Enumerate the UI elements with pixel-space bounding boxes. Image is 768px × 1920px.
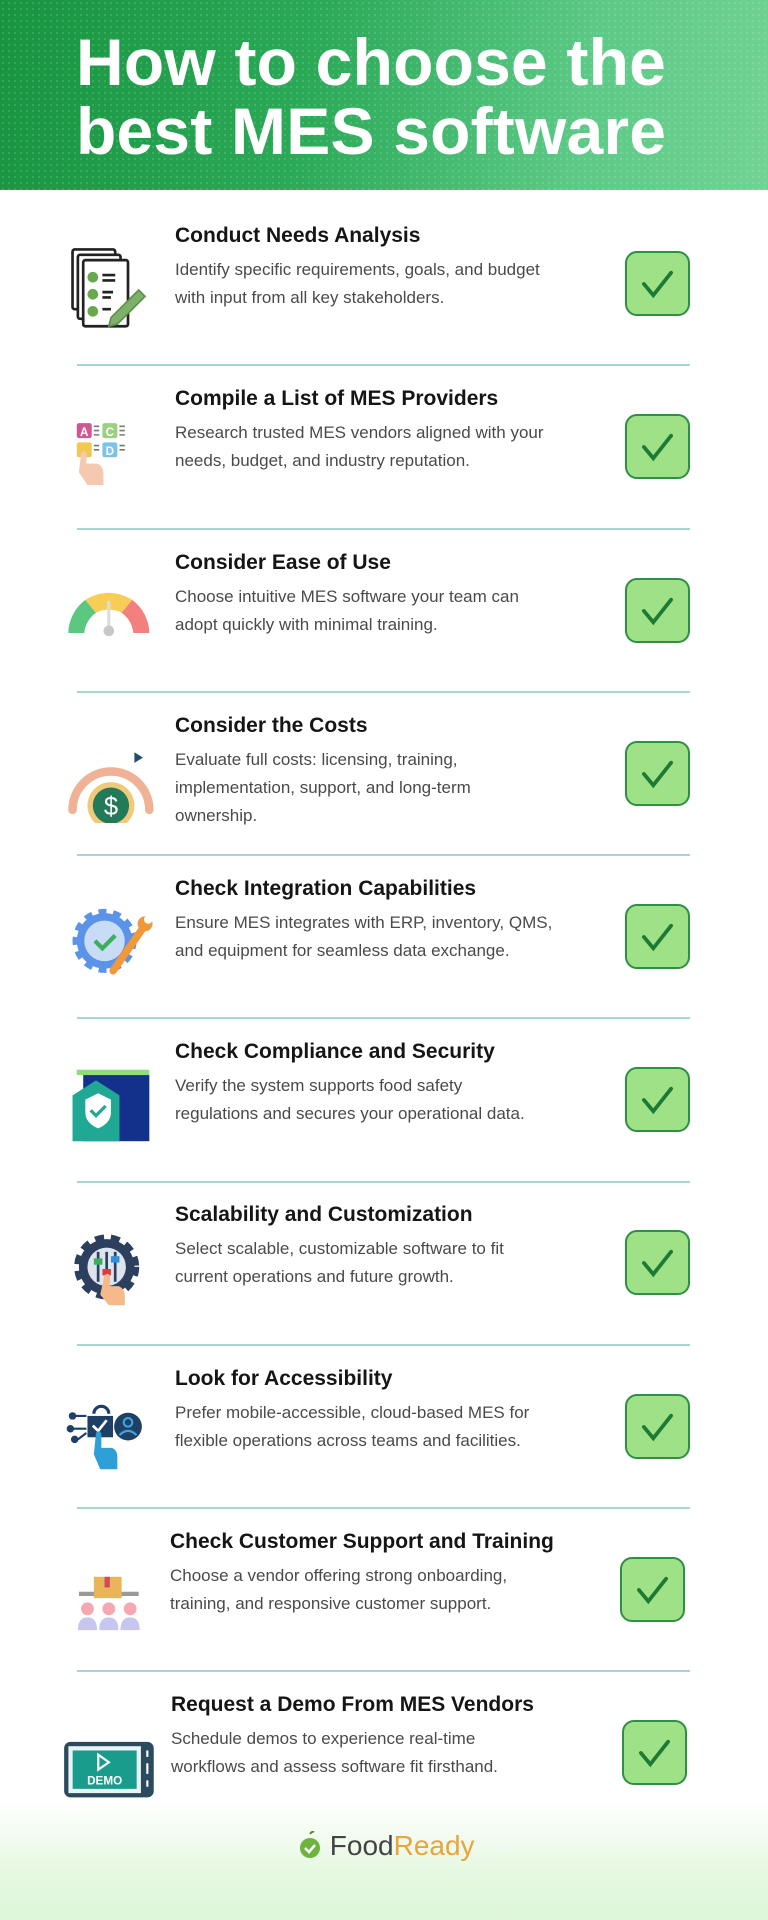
description [175,423,544,470]
description: and equipment for seamless data exchange. [175,941,510,960]
description: ownership. [175,806,257,825]
heading: Consider Ease of Use [175,551,391,574]
icon: checkbox [622,1720,687,1785]
icon: dollar coin: $ [104,793,118,821]
icon: gear sliders [74,1234,140,1306]
icon: checkbox [625,251,690,316]
description [175,913,552,960]
heading: Conduct Needs Analysis [175,224,420,247]
row 8: accessibility [66,1367,690,1470]
icon: gear and wrench [72,908,153,974]
icon: checkbox [625,414,690,479]
heading: Consider the Costs [175,714,368,737]
row 6: compliance [72,1040,690,1142]
description: current operations and future growth. [175,1267,454,1286]
header banner [0,0,768,190]
description: Schedule demos to experience real-time [171,1729,475,1748]
row 2: list of providers [76,387,690,485]
description: with input from all key stakeholders. [175,288,444,307]
icon: ABCD cards: C [106,426,115,439]
description: Verify the system supports food safety [175,1076,462,1095]
description: Evaluate full costs: licensing, training, [175,750,458,769]
description: Ensure MES integrates with ERP, inventory, QMS, [175,913,552,932]
description [175,587,519,634]
description: implementation, support, and long-term [175,778,471,797]
description [175,260,540,307]
heading: Compile a List of MES Providers [175,387,498,410]
icon: checkbox [625,1230,690,1295]
title: How to choose the [76,25,666,99]
icon: checkbox [625,904,690,969]
row 5: integration [72,877,690,974]
icon: ABCD cards: D [106,445,114,458]
row 9: customer support [78,1530,685,1630]
description: flexible operations across teams and facilities. [175,1431,521,1450]
icon: checkbox [625,1067,690,1132]
logo: FoodReady: FoodReady [330,1830,475,1861]
description: Select scalable, customizable software to fit [175,1239,504,1258]
description [171,1729,498,1776]
description: training, and responsive customer support. [170,1594,491,1613]
description: needs, budget, and industry reputation. [175,451,470,470]
title [76,25,666,168]
description [175,750,471,825]
description: Prefer mobile-accessible, cloud-based MES for [175,1403,529,1422]
heading: Look for Accessibility [175,1367,392,1390]
description: Choose a vendor offering strong onboarding, [170,1566,507,1585]
icon: ABCD cards [76,423,125,485]
icon: checkbox [625,741,690,806]
row 10: demo [64,1693,687,1798]
description: Choose intuitive MES software your team can [175,587,519,606]
description [175,1403,529,1450]
description: Research trusted MES vendors aligned with your [175,423,544,442]
icon: demo tablet [64,1742,154,1798]
description [175,1239,504,1286]
icon: checklist [71,248,146,328]
row 1: needs analysis [71,224,690,328]
description: regulations and secures your operational data. [175,1104,525,1123]
icon: training people [78,1576,140,1630]
heading: Check Customer Support and Training [170,1530,554,1553]
description: adopt quickly with minimal training. [175,615,438,634]
icon: checkbox [625,1394,690,1459]
footer background [0,1800,768,1920]
row 4: costs [68,714,690,825]
title: best MES software [76,94,666,168]
icon: checkbox [620,1557,685,1622]
description [175,1076,525,1123]
icon: access hand [66,1404,142,1470]
icon: shield [72,1070,150,1142]
icon: checkbox [625,578,690,643]
description: workflows and assess software fit firsthand. [171,1757,498,1776]
description: Identify specific requirements, goals, and budget [175,260,540,279]
row 3: ease of use [68,551,690,643]
heading: Check Integration Capabilities [175,877,476,900]
heading: Request a Demo From MES Vendors [171,1693,534,1716]
icon: ABCD cards: A [80,426,89,439]
icon: dollar coin [68,752,154,823]
row 7: scalability [74,1203,690,1306]
icon: demo tablet: DEMO [87,1775,122,1788]
heading: Check Compliance and Security [175,1040,495,1063]
icon: gauge [68,592,150,636]
heading: Scalability and Customization [175,1203,473,1226]
description [170,1566,507,1613]
